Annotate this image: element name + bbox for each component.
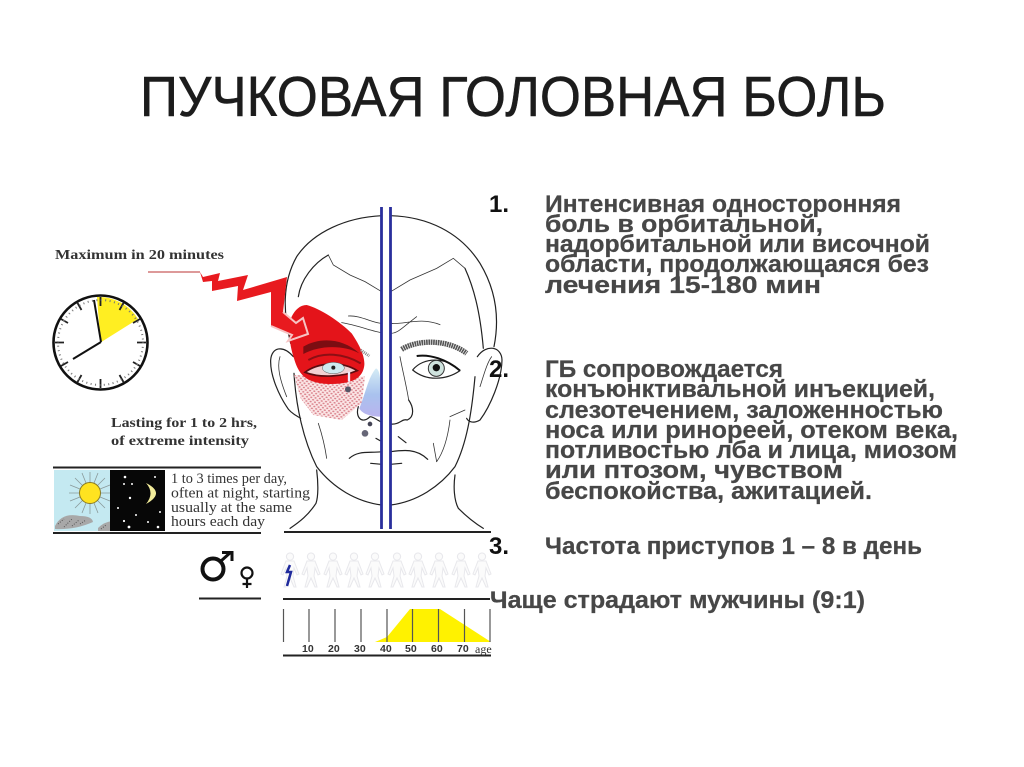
chart: age distribution: 60 — [431, 643, 443, 655]
text block: item 2: 2. — [489, 356, 509, 383]
text block: item 1: 1. — [489, 191, 509, 218]
chart: age distribution — [283, 609, 492, 656]
chart: age distribution: 10 — [302, 643, 314, 655]
text block: item 1: боль в орбитальной, — [545, 211, 823, 238]
chart: age distribution: age — [475, 642, 492, 656]
text block: sex ratio: Чаще страдают мужчины (9:1) — [490, 587, 865, 614]
title: ПУЧКОВАЯ ГОЛОВНАЯ БОЛЬ — [140, 65, 886, 129]
icon: male — [202, 552, 232, 580]
icon: day sky with sun — [54, 470, 112, 531]
text block: item 2: слезотечением, заложенностью — [545, 397, 943, 424]
red pain area — [289, 305, 364, 384]
left brow lines — [342, 316, 382, 333]
label: lasting: of extreme intensity — [111, 434, 249, 449]
frequency text: hours each day — [171, 514, 266, 530]
ears — [271, 348, 502, 422]
frequency text: 1 to 3 times per day, — [171, 471, 287, 487]
text block: item 2: потливостью лба и лица, миозом — [545, 437, 957, 464]
painful eye — [303, 340, 369, 382]
chart: age distribution: 50 — [405, 643, 417, 655]
nose — [357, 400, 413, 443]
icon: night sky with moon — [110, 470, 165, 531]
panel: day and night frequency — [53, 468, 310, 533]
right eyebrow — [402, 342, 467, 353]
left cheek line — [318, 423, 437, 462]
text block: item 2 — [489, 356, 958, 505]
text block: item 2: конъюнктивальной инъекцией, — [545, 376, 935, 403]
text block: item 2: ГБ сопровождается — [545, 356, 783, 383]
label: maximum in 20 minutes: Maximum in 20 minutes — [55, 248, 225, 263]
text block: item 1 — [489, 191, 930, 299]
frequency text: often at night, starting — [171, 486, 310, 502]
chart: age distribution: 20 — [328, 643, 340, 655]
arrow: lightning bolt — [148, 272, 308, 341]
blue midline — [382, 207, 390, 529]
pictogram: people ratio — [281, 553, 491, 587]
icon: gender symbols — [199, 532, 491, 599]
blue sinus and drops — [345, 368, 381, 437]
head outline — [285, 216, 496, 528]
icon: face diagram — [271, 216, 502, 528]
text block: item 3: 3. — [489, 533, 509, 560]
text block: item 2: или птозом, чувством — [545, 457, 843, 484]
right eye — [413, 356, 460, 378]
text block: item 3: Частота приступов 1 – 8 в день — [545, 533, 922, 560]
text block: item 1: Интенсивная односторонняя — [545, 191, 901, 218]
text block: item 2: носа или ринореей, отеком века, — [545, 417, 958, 444]
text block: item 1: области, продолжающаяся без — [545, 251, 929, 278]
frequency text: usually at the same — [171, 500, 292, 516]
label: lasting — [111, 416, 257, 449]
text block: item 1: лечения 15-180 мин — [545, 272, 821, 299]
chart: age distribution: 70 — [457, 643, 469, 655]
text block: item 1: надорбитальной или височной — [545, 231, 930, 258]
icon: female — [242, 568, 252, 588]
chart: age distribution: 30 — [354, 643, 366, 655]
text block: item 2: беспокойства, ажитацией. — [545, 478, 872, 505]
icon: clock — [54, 296, 148, 390]
mouth — [349, 450, 428, 464]
label: lasting: Lasting for 1 to 2 hrs, — [111, 416, 257, 431]
frequency text — [171, 471, 310, 530]
chart: age distribution: 40 — [380, 643, 392, 655]
pink pain dots — [294, 375, 365, 420]
right face wrinkles — [391, 317, 465, 462]
